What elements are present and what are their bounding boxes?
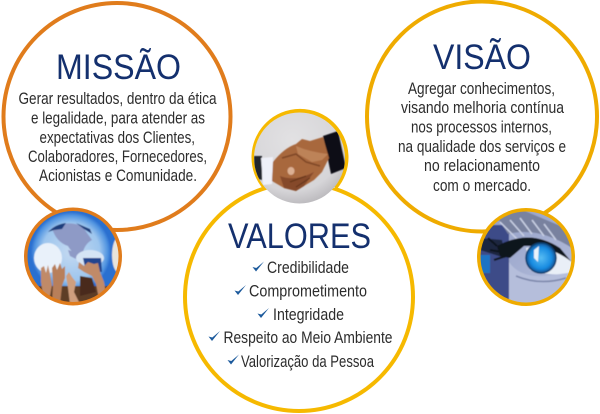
value: respeito ao meio ambiente: Respeito ao Meio Ambiente xyxy=(224,329,392,347)
valores list xyxy=(208,259,392,371)
visão text xyxy=(398,80,566,195)
missão circle xyxy=(4,3,230,230)
visão text: com o mercado. xyxy=(433,177,531,195)
visão circle xyxy=(367,2,597,232)
missão text xyxy=(18,90,217,185)
valores circle xyxy=(185,183,413,411)
panel: valores xyxy=(185,111,413,411)
missão text: Colaboradores, Fornecedores, xyxy=(28,148,207,166)
visão text: visando melhoria contínua xyxy=(401,99,565,117)
visão text: na qualidade dos serviços e xyxy=(398,138,566,156)
value: integridade: Integridade xyxy=(273,306,344,324)
visão text: nos processos internos, xyxy=(411,118,552,136)
value: comprometimento: Comprometimento xyxy=(249,282,367,300)
missão text: Gerar resultados, dentro da ética xyxy=(18,90,217,108)
visão text: Agregar conhecimentos, xyxy=(408,80,555,98)
missão text: expectativas dos Clientes, xyxy=(40,129,195,147)
missão heading: MISSÃO xyxy=(56,48,181,87)
visão heading: VISÃO xyxy=(433,38,531,77)
valores heading: VALORES xyxy=(228,217,371,256)
panel: missão xyxy=(4,3,230,306)
value: credibilidade: Credibilidade xyxy=(267,259,349,277)
icon: blue eye xyxy=(478,209,576,307)
icon: globe with raised hands xyxy=(25,208,124,306)
visão text: no relacionamento xyxy=(424,157,540,175)
icon: handshake xyxy=(253,111,346,204)
value: valorização da pessoa: Valorização da Pessoa xyxy=(241,353,375,371)
missão text: Acionistas e Comunidade. xyxy=(39,167,197,185)
panel: visão xyxy=(367,2,597,307)
missão text: e legalidade, para atender as xyxy=(31,110,205,128)
